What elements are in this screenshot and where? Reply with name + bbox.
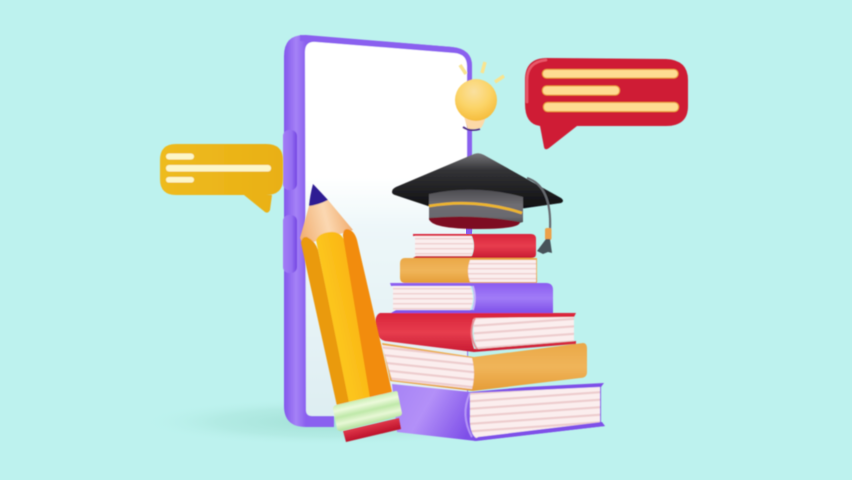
book 4: red	[375, 313, 576, 352]
pencil lead	[309, 184, 328, 206]
book 6: purple	[392, 383, 605, 441]
pencil	[300, 184, 402, 442]
pencil eraser	[343, 418, 401, 442]
pencil right facet	[343, 229, 392, 398]
phone side button upper	[283, 130, 297, 190]
bulb glass	[455, 79, 497, 121]
pencil middle facet	[316, 232, 372, 403]
phone strip behind cap	[466, 228, 472, 234]
cap board	[392, 153, 563, 210]
red speech bubble	[525, 58, 688, 149]
light bulb	[455, 62, 504, 130]
cap gold band	[429, 203, 522, 213]
phone side button lower	[283, 215, 297, 273]
yellow speech bubble	[160, 144, 283, 213]
phone screen	[305, 42, 467, 416]
book 3: purple	[390, 283, 553, 313]
floor shadow	[140, 398, 520, 446]
pencil ferrule	[333, 391, 402, 431]
book stack	[375, 234, 605, 441]
bulb rays	[460, 62, 504, 82]
book 1: red	[413, 234, 536, 258]
book 5: orange	[382, 343, 587, 391]
book 2: orange	[400, 258, 537, 283]
bubble text lines	[542, 70, 678, 112]
cap skull	[429, 190, 523, 229]
graduation cap	[392, 153, 563, 254]
bubble text lines	[166, 154, 271, 182]
cap lining	[429, 217, 520, 229]
phone frame	[284, 35, 472, 427]
phone top and right edge	[300, 35, 472, 232]
pencil wood	[300, 200, 353, 245]
tassel	[527, 178, 552, 254]
pencil left facet	[301, 237, 350, 406]
smartphone	[283, 35, 472, 427]
bulb base	[464, 116, 486, 130]
